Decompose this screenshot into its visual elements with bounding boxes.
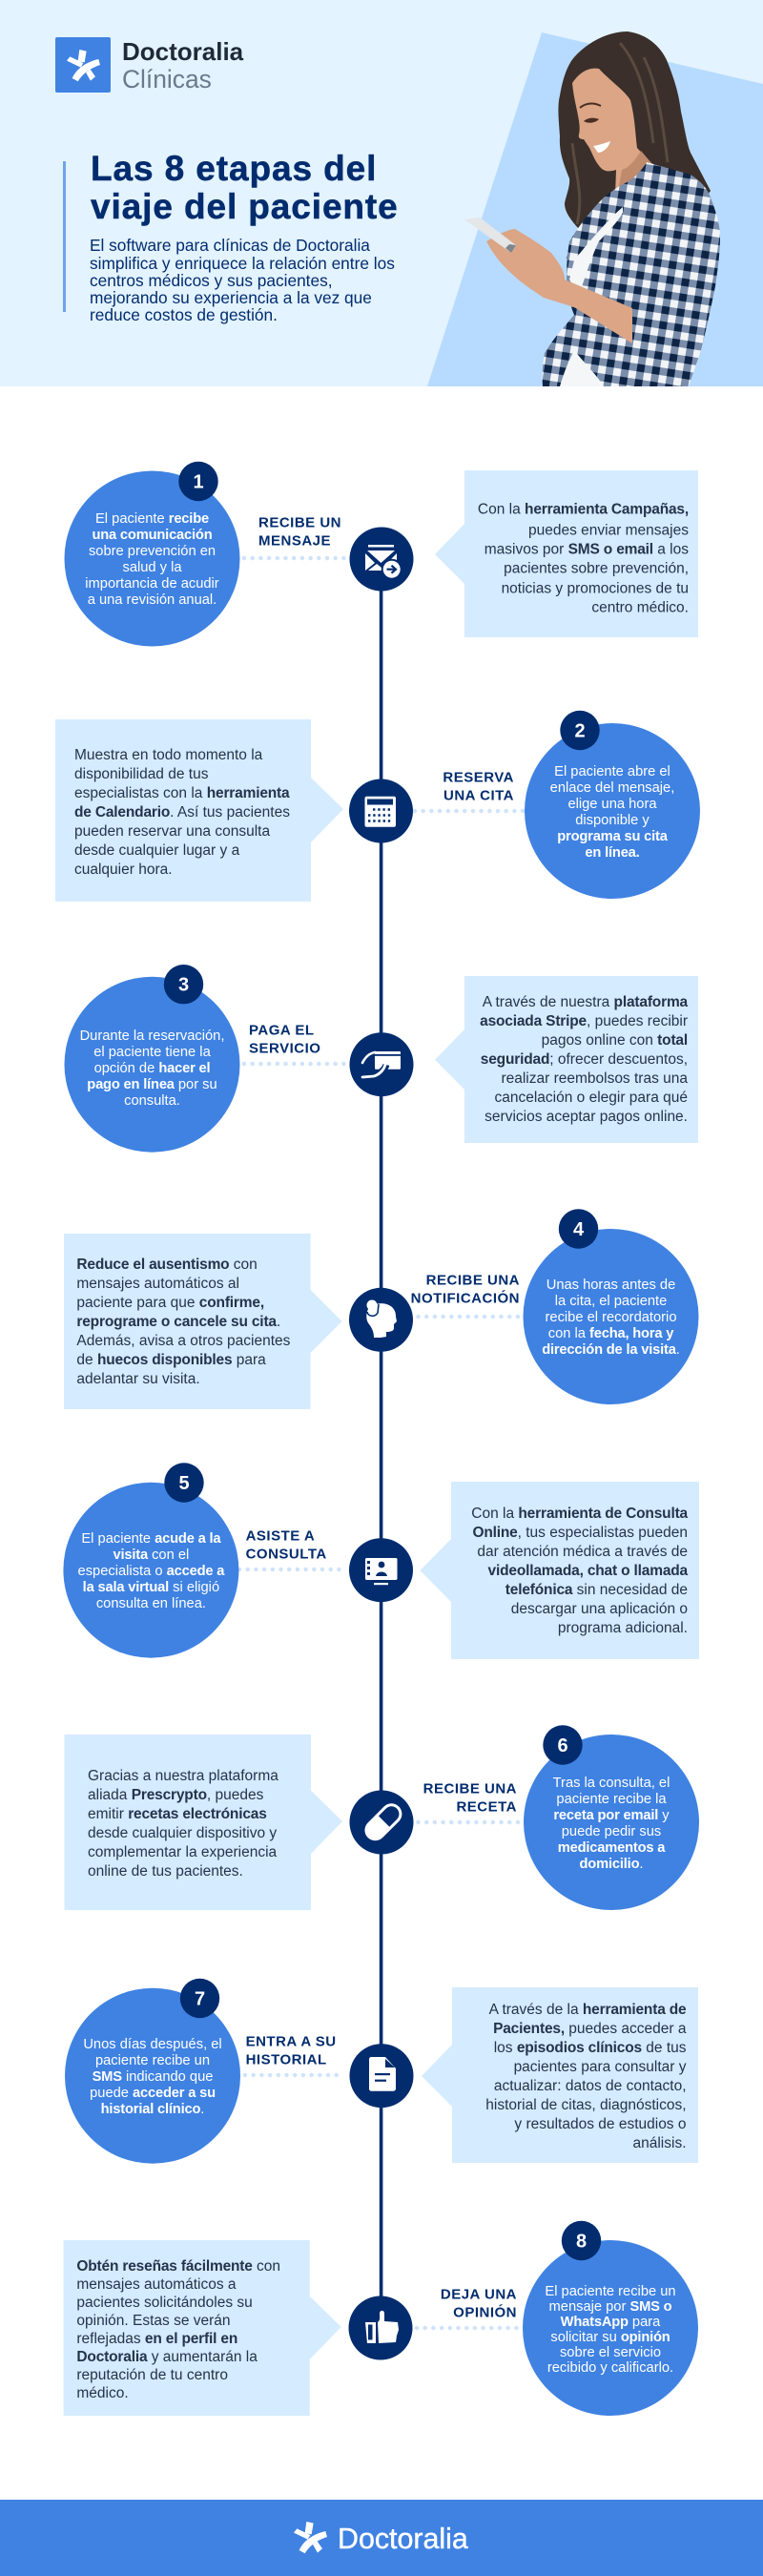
step 1 xyxy=(65,462,698,647)
icon: head with light bulb xyxy=(349,1288,413,1352)
info box 3: seguridad; ofrecer descuentos, xyxy=(481,1051,688,1068)
blue circle 1: El paciente recibe xyxy=(95,511,209,527)
blue circle 1: una comunicación xyxy=(92,528,213,543)
label 2: RESERVA xyxy=(443,769,514,786)
info box 3: realizar reembolsos tras una xyxy=(501,1070,688,1087)
dotted connector 1 xyxy=(244,556,344,560)
blue circle 5: visita con el xyxy=(113,1548,189,1563)
badge 1 xyxy=(178,462,218,501)
info box 7: pacientes para consultar y xyxy=(514,2059,687,2075)
info box 6: Gracias a nuestra plataforma xyxy=(88,1768,278,1784)
intro text: mejorando su experiencia a la vez que xyxy=(90,288,372,307)
blue circle 4: dirección de la visita. xyxy=(542,1342,680,1358)
info box 8: reflejadas en el perfil en xyxy=(76,2331,237,2347)
blue circle 7: SMS indicando que xyxy=(93,2069,213,2085)
info box 4: mensajes automáticos al xyxy=(76,1276,239,1292)
photo: woman using a phone xyxy=(464,31,720,386)
blue circle 2: disponible y xyxy=(575,813,650,828)
label 8: OPINIÓN xyxy=(453,2303,517,2320)
blue circle 1: salud y la xyxy=(122,560,182,575)
blue circle 4 xyxy=(523,1229,698,1404)
header panel xyxy=(0,0,763,386)
info box 6: desde cualquier dispositivo y xyxy=(88,1825,277,1841)
step 5 xyxy=(63,1463,699,1659)
badge 3: 3 xyxy=(178,975,189,996)
blue circle 7: paciente recibe un xyxy=(95,2053,210,2068)
label 3: PAGA EL xyxy=(249,1023,315,1038)
blue circle 5: la sala virtual si eligió xyxy=(83,1580,219,1595)
intro text: centros médicos y sus pacientes, xyxy=(90,271,333,290)
badge 4 xyxy=(559,1209,598,1249)
info box 3 xyxy=(435,976,698,1143)
label 5: ASISTE A xyxy=(246,1528,315,1544)
blue circle 2: elige una hora xyxy=(567,797,657,812)
title: viaje del paciente xyxy=(91,187,399,226)
info box 8: pacientes solicitándoles su xyxy=(76,2295,253,2311)
badge 6 xyxy=(543,1725,583,1765)
info box 4: de huecos disponibles para xyxy=(76,1352,266,1368)
label 8: DEJA UNA xyxy=(441,2286,517,2303)
blue circle 5: consulta en línea. xyxy=(96,1596,206,1611)
label 2: UNA CITA xyxy=(443,788,514,803)
blue circle 6: paciente recibe la xyxy=(556,1792,667,1807)
blue circle 5: especialista o accede a xyxy=(78,1564,225,1579)
icon: capsule xyxy=(349,1790,414,1855)
label 2 xyxy=(443,769,514,803)
blue circle 4: la cita, el paciente xyxy=(555,1294,667,1309)
label 1: MENSAJE xyxy=(258,532,331,550)
badge 4: 4 xyxy=(573,1219,585,1240)
info box 7: los episodios clínicos de tus xyxy=(494,2040,687,2056)
footer xyxy=(0,2500,763,2576)
badge 5 xyxy=(164,1463,204,1503)
blue circle 3: pago en línea por su xyxy=(87,1077,217,1092)
label 1 xyxy=(258,515,341,550)
label 7 xyxy=(246,2034,337,2068)
icon: hand holding card xyxy=(349,1032,414,1096)
blue circle 8: recibido y calificarlo. xyxy=(547,2360,673,2376)
info box 2: pueden reservar una consulta xyxy=(74,823,270,840)
dotted connector 8 xyxy=(417,2326,523,2330)
label 4: NOTIFICACIÓN xyxy=(411,1290,520,1307)
blue circle 4: Unas horas antes de xyxy=(546,1278,675,1293)
label 4 xyxy=(411,1273,520,1307)
badge 6: 6 xyxy=(557,1735,568,1756)
step 8 xyxy=(64,2221,698,2416)
step 4 xyxy=(64,1209,698,1409)
info box 2: Muestra en todo momento la xyxy=(74,747,263,763)
label 1: RECIBE UN xyxy=(258,515,341,530)
info box 1: noticias y promociones de tu xyxy=(502,580,689,597)
info box 8: mensajes automáticos a xyxy=(76,2276,237,2293)
blue circle 5 xyxy=(63,1483,238,1658)
info box 6: complementar la experiencia xyxy=(88,1844,278,1860)
dotted connector 5 xyxy=(239,1568,343,1571)
intro text: simplifica y enriquece la relación entre los xyxy=(90,254,395,273)
dotted connector 2 xyxy=(415,809,525,813)
info box 3: pagos online con total xyxy=(542,1032,688,1049)
info box 4: paciente para que confirme, xyxy=(76,1295,264,1311)
badge 3 xyxy=(164,965,203,1004)
info box 8 xyxy=(64,2240,341,2416)
label 3: SERVICIO xyxy=(249,1040,320,1057)
badge 8: 8 xyxy=(576,2231,587,2252)
blue circle 6 xyxy=(524,1735,699,1910)
info box 5: Online, tus especialistas pueden xyxy=(472,1525,688,1541)
badge 2: 2 xyxy=(574,721,586,742)
blue circle 4: con la fecha, hora y xyxy=(548,1326,674,1341)
blue circle 3 xyxy=(65,977,240,1153)
info box 7 xyxy=(422,1987,698,2163)
step 7 xyxy=(65,1979,698,2164)
blue circle 2: en línea. xyxy=(585,845,640,861)
blue circle 7: puede acceder a su xyxy=(90,2086,216,2101)
info box 7: análisis. xyxy=(633,2135,687,2151)
info box 4: Reduce el ausentismo con xyxy=(76,1257,258,1273)
info box 7: y resultados de estudios o xyxy=(514,2116,687,2132)
blue circle 6: receta por email y xyxy=(553,1808,670,1823)
logo: Doctoralia Clínicas: Doctoralia xyxy=(122,37,244,66)
info box 5: videollamada, chat o llamada xyxy=(488,1563,689,1579)
info box 3: A través de nuestra plataforma xyxy=(483,994,689,1010)
info box 1: masivos por SMS o email a los xyxy=(485,542,689,557)
info box 2: disponibilidad de tus xyxy=(74,766,209,782)
badge 7: 7 xyxy=(195,1988,205,2009)
logo: Doctoralia Clínicas: Clínicas xyxy=(122,65,212,93)
dotted connector 6 xyxy=(418,1820,524,1824)
label 6: RECETA xyxy=(456,1799,517,1815)
icon: calendar xyxy=(349,779,413,843)
timeline line xyxy=(380,559,382,2328)
blue circle 1: sobre prevención en xyxy=(89,544,216,559)
blue circle 6: domicilio. xyxy=(580,1857,643,1872)
blue circle 3: Durante la reservación, xyxy=(80,1028,224,1044)
blue circle 2 xyxy=(525,723,700,899)
dotted connector 3 xyxy=(244,1062,344,1066)
info box 8: Doctoralia y aumentarán la xyxy=(76,2349,258,2365)
icon: video consultation screen xyxy=(349,1538,413,1602)
label 8 xyxy=(441,2286,517,2320)
blue circle 6: Tras la consulta, el xyxy=(553,1776,670,1791)
badge 1: 1 xyxy=(193,471,204,492)
logo: Doctoralia Clínicas xyxy=(55,37,244,93)
label 7: ENTRA A SU xyxy=(246,2034,337,2049)
info box 5: Con la herramienta de Consulta xyxy=(471,1506,689,1522)
intro text: reduce costos de gestión. xyxy=(90,305,278,324)
blue circle 6: medicamentos a xyxy=(558,1840,666,1856)
dotted connector 7 xyxy=(245,2073,344,2077)
title: Las 8 etapas del xyxy=(91,149,377,188)
info box 2: de Calendario. Así tus pacientes xyxy=(74,804,290,821)
badge 5: 5 xyxy=(178,1473,190,1494)
info box 2: desde cualquier lugar y a xyxy=(74,842,240,859)
blue circle 8: El paciente recibe un xyxy=(545,2284,676,2299)
footer wordmark: Doctoralia xyxy=(338,2523,468,2555)
info box 2 xyxy=(55,719,343,902)
info box 4: adelantar su visita. xyxy=(76,1371,200,1387)
info box 4: reprograme o cancele su cita. xyxy=(76,1314,280,1330)
info box 1: puedes enviar mensajes xyxy=(528,523,689,538)
info box 5 xyxy=(420,1482,699,1659)
info box 1: pacientes sobre prevención, xyxy=(504,561,689,576)
icon: envelope with arrow xyxy=(349,527,414,592)
info box 1: centro médico. xyxy=(591,599,689,616)
info box 8: opinión. Estas se verán xyxy=(76,2313,231,2329)
badge 8 xyxy=(562,2221,601,2260)
badge 7 xyxy=(180,1979,219,2018)
info box 5: dar atención médica a través de xyxy=(477,1544,688,1560)
info box 8: reputación de tu centro xyxy=(76,2367,228,2383)
label 7: HISTORIAL xyxy=(246,2051,327,2068)
icon: document xyxy=(349,2044,414,2108)
label 6: RECIBE UNA xyxy=(423,1780,517,1797)
info box 3: servicios aceptar pagos online. xyxy=(485,1109,688,1125)
badge 2 xyxy=(560,711,600,750)
info box 7: actualizar: datos de contacto, xyxy=(494,2078,687,2094)
info box 3: asociada Stripe, puedes recibir xyxy=(480,1013,688,1029)
info box 8: Obtén reseñas fácilmente con xyxy=(76,2258,280,2275)
step 3 xyxy=(65,965,698,1153)
blue circle 8 xyxy=(523,2240,698,2416)
label 6 xyxy=(423,1780,517,1815)
blue circle 3: opción de hacer el xyxy=(94,1061,211,1076)
label 5: CONSULTA xyxy=(246,1546,327,1563)
blue circle 1 xyxy=(65,471,240,647)
info box 5: programa adicional. xyxy=(558,1620,688,1636)
blue circle 5: El paciente acude a la xyxy=(81,1531,221,1547)
blue circle 8: solicitar su opinión xyxy=(550,2330,670,2345)
info box 7: Pacientes, puedes acceder a xyxy=(493,2021,687,2037)
blue circle 3: el paciente tiene la xyxy=(93,1045,212,1060)
info box 3: cancelación o elegir para qué xyxy=(494,1090,688,1106)
step 6 xyxy=(65,1725,699,1910)
info box 7: A través de la herramienta de xyxy=(489,2002,687,2018)
info box 4: Además, avisa a otros pacientes xyxy=(76,1333,291,1349)
blue circle 7: historial clínico. xyxy=(101,2102,204,2117)
info box 6: emitir recetas electrónicas xyxy=(88,1806,267,1822)
blue circle 4: recibe el recordatorio xyxy=(546,1310,676,1325)
label 3 xyxy=(249,1023,320,1057)
blue circle 3: consulta. xyxy=(124,1093,180,1109)
intro text: El software para clínicas de Doctoralia xyxy=(90,236,370,255)
light blue background shape xyxy=(427,32,763,386)
info box 5: telefónica sin necesidad de xyxy=(505,1582,688,1598)
info box 5: descargar una aplicación o xyxy=(511,1601,688,1617)
label 5 xyxy=(246,1528,327,1563)
footer logo mark xyxy=(294,2522,327,2553)
blue circle 1: importancia de acudir xyxy=(85,576,219,592)
label 4: RECIBE UNA xyxy=(426,1273,520,1288)
intro text xyxy=(90,236,395,324)
icon: thumbs up xyxy=(349,2296,412,2360)
info box 6: aliada Prescrypto, puedes xyxy=(88,1787,264,1803)
blue circle 2: El paciente abre el xyxy=(554,764,670,779)
blue circle 8: WhatsApp para xyxy=(561,2315,661,2330)
info box 2: cualquier hora. xyxy=(74,862,173,878)
info box 8: médico. xyxy=(76,2385,129,2401)
info box 6: online de tus pacientes. xyxy=(88,1863,243,1880)
blue circle 1: a una revisión anual. xyxy=(88,592,217,608)
info box 2: especialistas con la herramienta xyxy=(74,785,290,801)
blue circle 7 xyxy=(65,1988,240,2164)
title xyxy=(63,149,399,312)
blue circle 2: enlace del mensaje, xyxy=(550,780,674,796)
step 2 xyxy=(55,711,700,902)
blue circle 7: Unos días después, el xyxy=(83,2037,222,2052)
blue circle 6: puede pedir sus xyxy=(562,1824,661,1839)
blue circle 8: sobre el servicio xyxy=(560,2345,661,2360)
info box 6 xyxy=(65,1735,342,1910)
blue circle 8: mensaje por SMS o xyxy=(549,2299,672,2315)
info box 7: historial de citas, diagnósticos, xyxy=(485,2097,687,2113)
info box 4 xyxy=(64,1234,342,1409)
blue circle 2: programa su cita xyxy=(557,829,669,844)
info box 1: Con la herramienta Campañas, xyxy=(478,502,689,517)
info box 1 xyxy=(435,470,698,637)
dotted connector 4 xyxy=(418,1315,524,1319)
